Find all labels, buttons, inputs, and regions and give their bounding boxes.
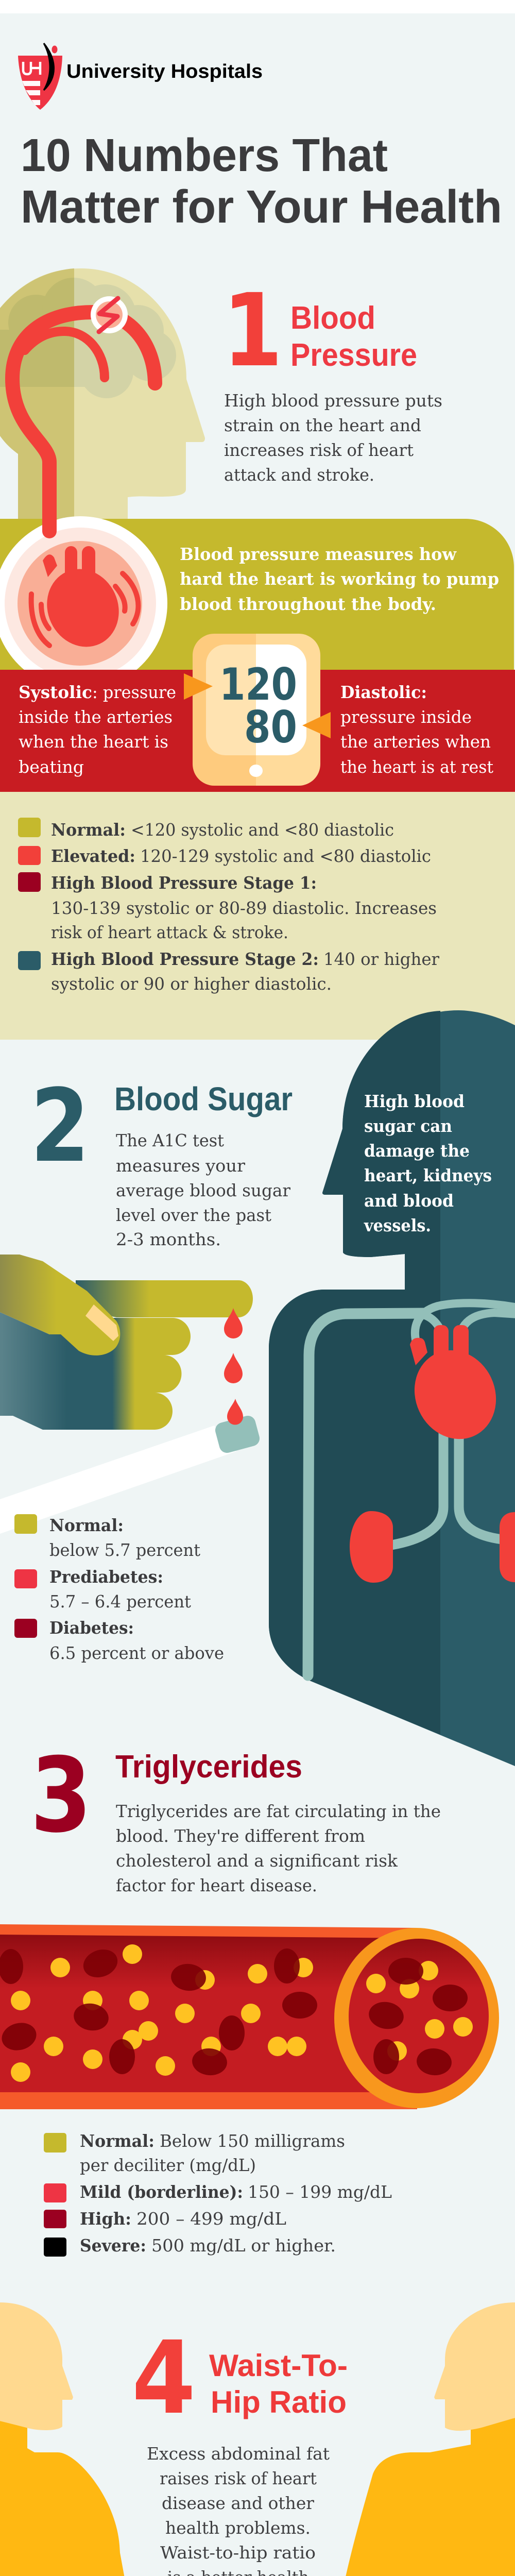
text: high blood sugar callout: damage the (364, 1141, 470, 1161)
legend: blood sugar: Prediabetes: (49, 1567, 163, 1587)
panel: blood pressure ranges: systolic or 90 or higher diastolic. (51, 974, 332, 994)
legend: triglycerides: Mild (borderline): (80, 2182, 243, 2202)
text: triglycerides: cholesterol and a significant risk (116, 1851, 398, 1871)
legend: blood sugar: Diabetes: (49, 1618, 134, 1638)
panel: blood pressure ranges: 140 or higher (323, 949, 439, 969)
panel: blood pressure ranges (0, 792, 515, 1040)
text: diastolic (340, 682, 493, 777)
panel: olive band (0, 519, 514, 670)
text: blood pressure intro: attack and stroke. (224, 465, 374, 485)
icon: blood pressure monitor: 80 (244, 702, 297, 753)
text: waist-to-hip: health problems. (165, 2518, 311, 2538)
heading: 1 Blood Pressure: Blood (290, 300, 375, 336)
heading: 2 Blood Sugar: 2 (30, 1067, 90, 1184)
fat particles (11, 1944, 313, 2082)
icon: blood pressure monitor (193, 634, 320, 786)
text: triglycerides: Triglycerides are fat circulating in the (116, 1801, 441, 1821)
figure: right person (335, 2302, 515, 2576)
heading: 1 Blood Pressure: Pressure (290, 337, 417, 373)
text: systolic: Systolic (19, 682, 92, 702)
legend: blood sugar: below 5.7 percent (49, 1540, 200, 1560)
panel: blood pressure ranges: High Blood Pressure Stage 2: (51, 949, 319, 969)
arrow: systolic (184, 673, 213, 700)
text: blood pressure intro: High blood pressure puts (224, 391, 442, 411)
text: diastolic: Diastolic: (340, 682, 427, 702)
text: diastolic: pressure inside (340, 707, 472, 727)
illustration: body with heart and kidneys (269, 1010, 515, 1766)
legend: blood sugar: Normal: (49, 1515, 124, 1535)
text: systolic: inside the arteries (19, 707, 173, 727)
illustration: head with brain and arteries (0, 268, 205, 531)
legend: blood sugar (14, 1514, 224, 1663)
text: blood pressure intro (224, 391, 442, 485)
heading: 1 Blood Pressure: 1 (222, 272, 283, 389)
icon: blood drops (224, 1308, 243, 1425)
artery (12, 312, 155, 531)
legend: triglycerides: 150 – 199 mg/dL (248, 2182, 392, 2202)
heading: 3 Triglycerides (30, 1736, 302, 1856)
heading: 4 Waist-To-Hip Ratio (132, 2319, 348, 2436)
legend: triglycerides: per deciliter (mg/dL) (80, 2155, 256, 2175)
text: high blood sugar callout: heart, kidneys (364, 1165, 492, 1185)
panel: blood pressure ranges: 120-129 systolic and <80 diastolic (140, 846, 431, 866)
title (21, 130, 502, 233)
text: high blood sugar callout: sugar can (364, 1116, 452, 1136)
legend: triglycerides: Severe: (80, 2235, 146, 2256)
text: systolic (19, 682, 176, 777)
heading: 4 Waist-To-Hip Ratio: 4 (132, 2319, 196, 2436)
text: A1C test: 2-3 months. (116, 1229, 221, 1249)
vessel opening (334, 1928, 499, 2108)
panel: blood pressure ranges: <120 systolic and <80 diastolic (131, 820, 394, 840)
text: blood pressure definition (180, 544, 499, 614)
arrow: diastolic (302, 712, 331, 738)
text: diastolic: the heart is at rest (340, 757, 493, 777)
heading: 4 Waist-To-Hip Ratio: Waist-To- (209, 2348, 348, 2383)
text: A1C test: average blood sugar (116, 1180, 290, 1200)
legend: triglycerides: 500 mg/dL or higher. (151, 2235, 336, 2256)
red blood cells (0, 1945, 317, 2077)
logo (18, 43, 263, 110)
kidneys (350, 1511, 515, 1583)
text: triglycerides (116, 1801, 441, 1895)
legend: blood sugar: 6.5 percent or above (49, 1643, 224, 1663)
text: A1C test: The A1C test (116, 1130, 224, 1150)
text: A1C test (116, 1130, 290, 1249)
legend: triglycerides: Below 150 milligrams (160, 2131, 345, 2151)
legend: triglycerides: Normal: (80, 2131, 154, 2151)
text: triglycerides: blood. They're different from (116, 1826, 365, 1846)
text: waist-to-hip: Excess abdominal fat (147, 2444, 330, 2464)
heading: 4 Waist-To-Hip Ratio: Hip Ratio (211, 2385, 347, 2419)
illustration: test strip (0, 1414, 261, 1534)
blood vessels (308, 1303, 515, 1675)
text: waist-to-hip: disease and other (162, 2493, 314, 2513)
illustration: blood vessel (0, 1924, 499, 2109)
figure: left person (0, 2302, 134, 2576)
text: high blood sugar callout: vessels. (364, 1215, 431, 1235)
text: systolic: beating (19, 757, 84, 777)
heading: 2 Blood Sugar: Blood Sugar (114, 1080, 293, 1117)
text: blood pressure definition: Blood pressure measures how (180, 544, 457, 564)
heading: 1 Blood Pressure (222, 272, 417, 389)
legend: triglycerides (44, 2131, 392, 2257)
title: Matter for Your Health (21, 181, 502, 233)
text: waist-to-hip (147, 2444, 330, 2576)
text: high blood sugar callout: and blood (364, 1191, 454, 1211)
legend: blood sugar: 5.7 – 6.4 percent (49, 1591, 191, 1612)
panel: blood pressure ranges: Elevated: (51, 846, 135, 866)
text: blood pressure intro: strain on the heart and (224, 415, 421, 435)
illustration: hand (0, 1255, 253, 1430)
panel: blood pressure ranges: Normal: (51, 820, 126, 840)
text: systolic: : pressure (92, 682, 176, 702)
title: 10 Numbers That (21, 130, 388, 181)
heading: 2 Blood Sugar (30, 1067, 293, 1184)
text: waist-to-hip: Waist-to-hip ratio (160, 2543, 316, 2563)
icon: blood pressure monitor: 120 (219, 659, 297, 710)
text: diastolic: the arteries when (340, 732, 491, 752)
text: triglycerides: factor for heart disease. (116, 1875, 317, 1895)
panel: blood pressure ranges: 130-139 systolic or 80-89 diastolic. Increases (51, 898, 437, 918)
text: waist-to-hip: raises risk of heart (160, 2468, 317, 2488)
panel: blood pressure ranges: risk of heart attack & stroke. (51, 922, 288, 942)
text: high blood sugar callout: High blood (364, 1091, 465, 1111)
legend: triglycerides: High: (80, 2209, 131, 2229)
panel: blood pressure ranges: High Blood Pressure Stage 1: (51, 873, 317, 893)
legend: triglycerides: 200 – 499 mg/dL (136, 2209, 286, 2229)
icon: lightning bolt (91, 296, 128, 333)
heart (400, 1325, 510, 1452)
text: high blood sugar callout (364, 1091, 492, 1235)
heading: 3 Triglycerides: 3 (30, 1736, 92, 1856)
text: blood pressure definition: hard the heart is working to pump (180, 569, 499, 589)
text: blood pressure definition: blood throughout the body. (180, 594, 436, 614)
text: systolic: when the heart is (19, 732, 168, 752)
text: A1C test: measures your (116, 1156, 245, 1176)
logo: University Hospitals (66, 61, 263, 82)
text: A1C test: level over the past (116, 1205, 271, 1225)
text: blood pressure intro: increases risk of heart (224, 440, 414, 460)
illustration: beating heart (0, 516, 167, 690)
panel: red band (0, 670, 515, 792)
heading: 3 Triglycerides: Triglycerides (115, 1749, 302, 1785)
